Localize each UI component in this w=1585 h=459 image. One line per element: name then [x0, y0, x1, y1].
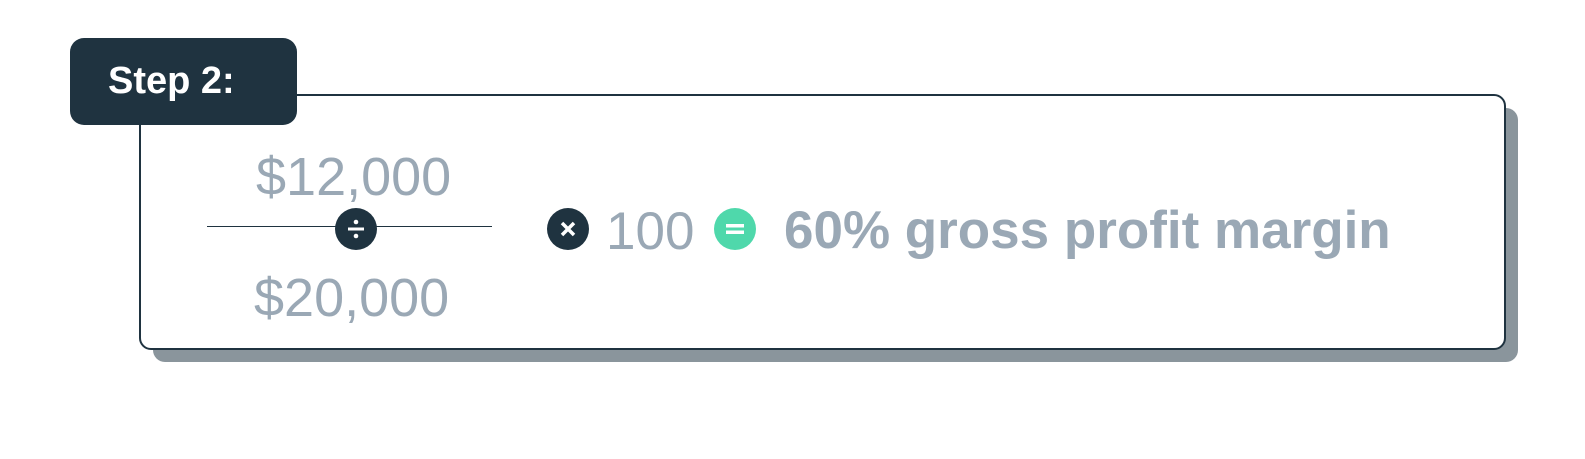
card shadow — [153, 108, 1518, 362]
panel: formula card — [139, 94, 1506, 350]
icon: multiply — [547, 208, 589, 250]
heading tab: Step 2 — [70, 38, 297, 125]
result text: 60% gross profit margin — [784, 201, 1391, 260]
numerator: $12,000 — [256, 147, 451, 207]
icon: equals — [714, 208, 756, 250]
icon: divide — [335, 208, 377, 250]
fraction line — [207, 226, 492, 227]
heading text: Step 2: — [108, 60, 235, 102]
denominator: $20,000 — [254, 268, 449, 328]
multiplier 100: 100 — [606, 202, 694, 261]
